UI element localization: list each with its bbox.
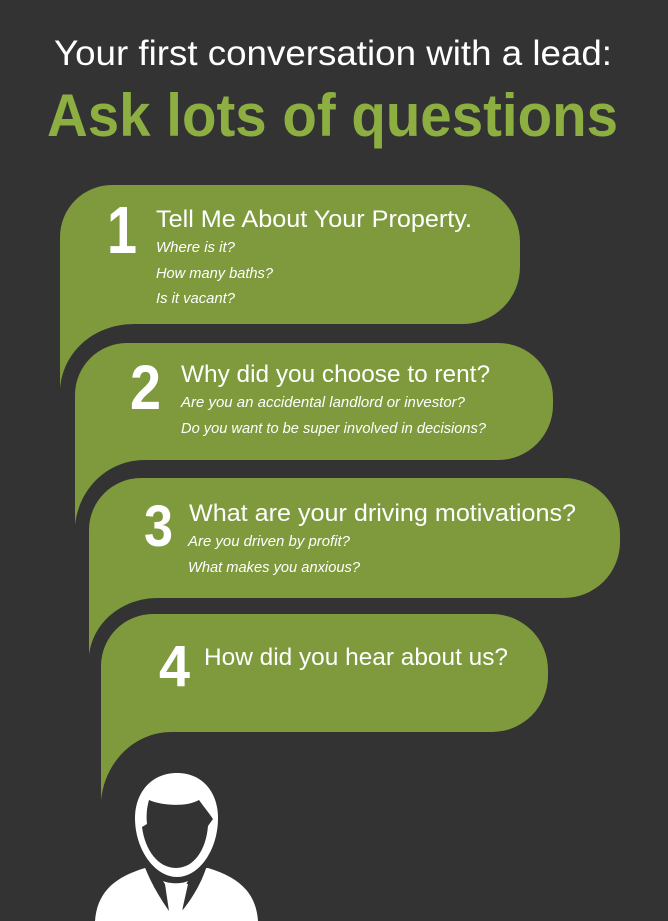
question 2 heading: Why did you choose to rent?: [181, 361, 490, 388]
shoulders: [95, 868, 258, 921]
question 1 prompts: How many baths?: [156, 266, 274, 282]
face: [142, 800, 213, 868]
question 2 prompts: Are you an accidental landlord or investor?: [180, 395, 466, 411]
number 2: 2: [130, 353, 161, 423]
head outline: [135, 773, 218, 877]
icon: businessman: [95, 773, 258, 921]
question 3 prompts: Are you driven by profit?: [187, 534, 351, 550]
number 4: 4: [159, 634, 190, 699]
question 1 heading: Tell Me About Your Property.: [156, 206, 472, 233]
number 1: 1: [107, 193, 137, 268]
title line: Your first conversation with a lead:: [54, 34, 612, 73]
number 3: 3: [144, 494, 173, 559]
question 2 prompts: [180, 395, 487, 437]
panel: question 4: [101, 614, 548, 800]
main heading: Ask lots of questions: [47, 82, 618, 149]
question 3 heading: What are your driving motivations?: [189, 500, 576, 527]
panel: question 1: [60, 185, 520, 388]
question 4 heading: How did you hear about us?: [204, 644, 508, 671]
question 2 prompts: Do you want to be super involved in decisions?: [181, 421, 487, 437]
panel: question 3: [89, 478, 620, 655]
tie: [163, 881, 188, 921]
question 1 prompts: Where is it?: [156, 240, 236, 256]
question 1 prompts: Is it vacant?: [156, 291, 236, 307]
collar gap: [143, 858, 208, 911]
question 3 prompts: What makes you anxious?: [188, 560, 361, 576]
question 3 prompts: [187, 534, 361, 576]
question 1 prompts: [156, 240, 274, 307]
panel: question 2: [75, 343, 553, 525]
